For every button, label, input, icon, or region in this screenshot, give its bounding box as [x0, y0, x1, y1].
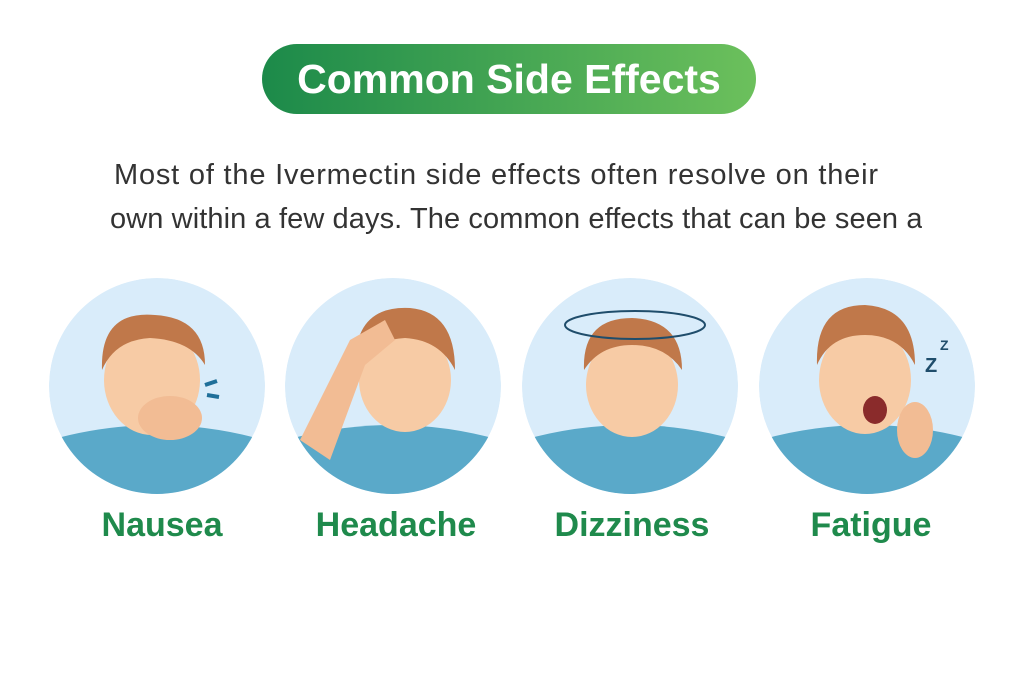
title	[262, 44, 756, 114]
illustrations	[49, 278, 975, 494]
icon: fatigue: Z	[940, 337, 949, 353]
label: fatigue: Fatigue	[811, 506, 931, 544]
title: Common Side Effects	[297, 56, 721, 102]
icon: nausea	[49, 278, 265, 500]
label: headache: Headache	[316, 506, 476, 544]
icon: fatigue: Z	[925, 355, 937, 377]
description text: Most of the Ivermectin side effects often resolve on their	[114, 159, 879, 191]
label: nausea: Nausea	[102, 506, 222, 544]
description text: own within a few days. The common effects that can be seen a	[110, 203, 922, 235]
icon: headache	[285, 278, 501, 500]
label: dizziness: Dizziness	[555, 506, 709, 544]
description text	[110, 159, 922, 235]
icon: fatigue	[759, 278, 975, 500]
icon: dizziness	[522, 278, 738, 500]
